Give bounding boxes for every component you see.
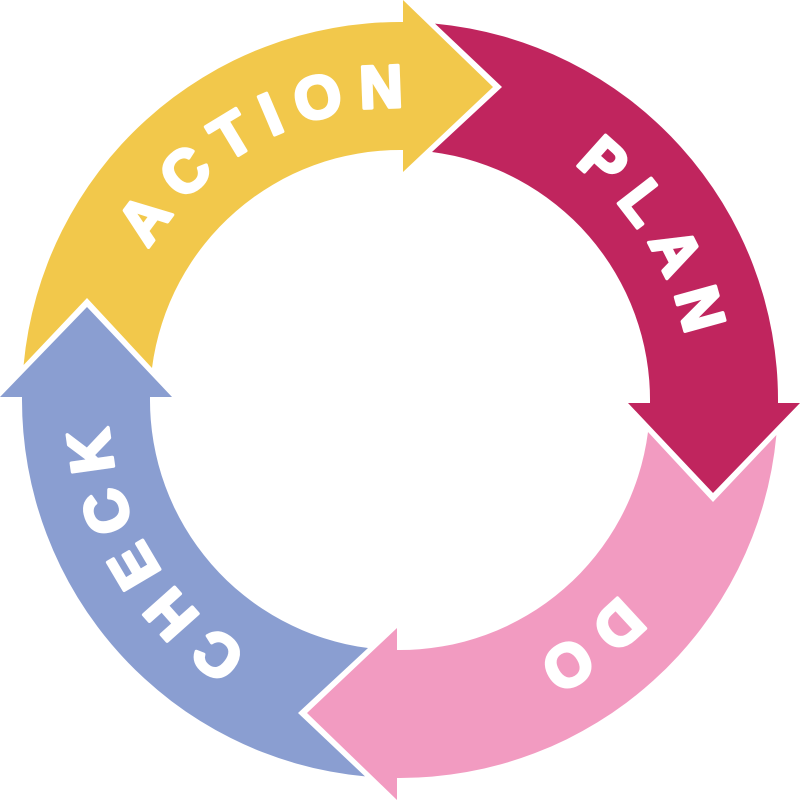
label: check: CHECK bbox=[66, 426, 240, 678]
arrow: do bbox=[307, 432, 776, 800]
arrow: plan bbox=[432, 24, 800, 493]
label: do: DO bbox=[544, 596, 648, 688]
label: action: ACTION bbox=[122, 64, 402, 249]
arrow: check bbox=[0, 307, 368, 776]
label: plan: PLAN bbox=[576, 134, 727, 333]
arrow: action bbox=[24, 0, 493, 368]
